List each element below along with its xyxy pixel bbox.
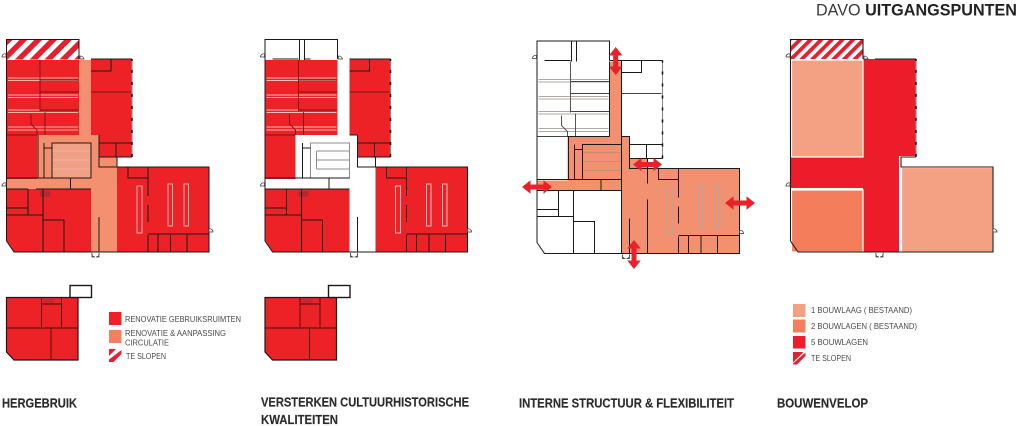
light partition lines bbox=[538, 80, 719, 234]
walls bbox=[6, 40, 209, 252]
label: te slopen: TE SLOPEN bbox=[811, 353, 851, 363]
stair block bbox=[310, 143, 350, 178]
label: 5 bouwlagen: 5 BOUWLAGEN bbox=[811, 337, 868, 347]
panel: interne structuur floor plan bbox=[532, 41, 744, 259]
label: 2 bouwlagen: 2 BOUWLAGEN ( BESTAAND) bbox=[811, 321, 917, 331]
circulation bbox=[538, 62, 740, 254]
arrow: courtyard bbox=[633, 158, 662, 171]
heading: hergebruik: HERGEBRUIK bbox=[2, 396, 77, 410]
label: 1 bouwlaag: 1 BOUWLAAG ( BESTAAND) bbox=[811, 305, 912, 315]
dashed east wall bbox=[915, 59, 917, 157]
panel: hergebruik floor plan bbox=[2, 40, 213, 257]
renovated rooms bbox=[7, 59, 209, 252]
arrow: top corridor bbox=[609, 47, 622, 75]
heading: interne structuur en flexibiliteit: INTERNE STRUCTUUR & FLEXIBILITEIT bbox=[519, 396, 734, 410]
heading: versterken cultuurhistorische kwaliteiten bbox=[261, 396, 469, 426]
1 storey east block bbox=[902, 168, 993, 252]
1 storey north block bbox=[792, 60, 863, 157]
renovated rooms bbox=[266, 59, 468, 252]
thin interior walls bbox=[266, 60, 390, 135]
panel: cultuurhistorische floor plan bbox=[260, 40, 472, 257]
dashed east wall bbox=[662, 60, 664, 158]
demolition hatch bbox=[791, 40, 863, 59]
label: gebruiksruimten: RENOVATIE GEBRUIKSRUIMTEN bbox=[125, 314, 241, 324]
arrow: east entrance bbox=[725, 196, 755, 210]
legend: bouwenvelop bbox=[793, 304, 917, 364]
swatch: circulatie bbox=[109, 330, 122, 343]
circulation bbox=[7, 60, 117, 252]
swatch: te slopen bbox=[793, 352, 806, 364]
light partition lines bbox=[266, 78, 447, 233]
arrow: west entrance bbox=[522, 180, 552, 194]
heading: versterken cultuurhistorische kwaliteiten: VERSTERKEN CULTUURHISTORISCHE bbox=[261, 396, 469, 410]
2 storeys south block bbox=[792, 190, 863, 252]
doors bbox=[786, 54, 997, 257]
doors bbox=[532, 55, 744, 259]
swatch: 1 bouwlaag bbox=[793, 304, 806, 317]
legend: hergebruik bbox=[109, 312, 241, 362]
doors bbox=[260, 54, 472, 257]
swatch: te slopen bbox=[109, 349, 122, 362]
stair block bbox=[52, 143, 91, 178]
thin interior walls bbox=[7, 60, 131, 135]
walls bbox=[537, 41, 740, 254]
small plan: hergebruik bbox=[6, 286, 92, 360]
heading: bouwenvelop: BOUWENVELOP bbox=[777, 396, 868, 410]
dashed east wall bbox=[390, 59, 392, 157]
label: circulatie line 2: CIRCULATIE bbox=[125, 338, 169, 348]
5 storeys bbox=[791, 59, 916, 252]
swatch: 2 bouwlagen bbox=[793, 320, 806, 332]
doors bbox=[2, 54, 213, 257]
panel: bouwenvelop massing plan bbox=[786, 40, 997, 257]
label: te slopen: TE SLOPEN bbox=[126, 351, 166, 361]
dark stair room bbox=[40, 191, 50, 197]
dashed east wall bbox=[131, 59, 133, 157]
walls bbox=[265, 40, 468, 252]
outline bbox=[790, 40, 993, 252]
light partition lines bbox=[8, 78, 188, 233]
label: circulatie: RENOVATIE & AANPASSING bbox=[125, 328, 226, 338]
demolition hatch bbox=[7, 40, 79, 60]
swatch: 5 bouwlagen bbox=[793, 336, 806, 348]
small plan: cultuurhistorische kwaliteiten bbox=[265, 286, 350, 360]
arrow: south entrance bbox=[627, 240, 641, 269]
thin interior walls bbox=[538, 62, 662, 136]
swatch: gebruiksruimten bbox=[109, 312, 122, 325]
dark stair room bbox=[298, 191, 308, 197]
